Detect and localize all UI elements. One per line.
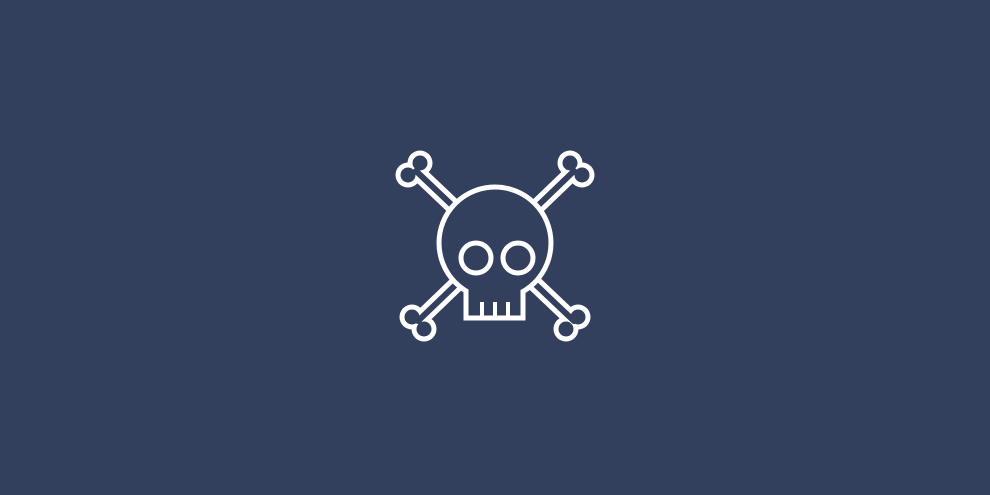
icon: skull: [439, 187, 551, 318]
icon: crossbones: [396, 150, 594, 342]
